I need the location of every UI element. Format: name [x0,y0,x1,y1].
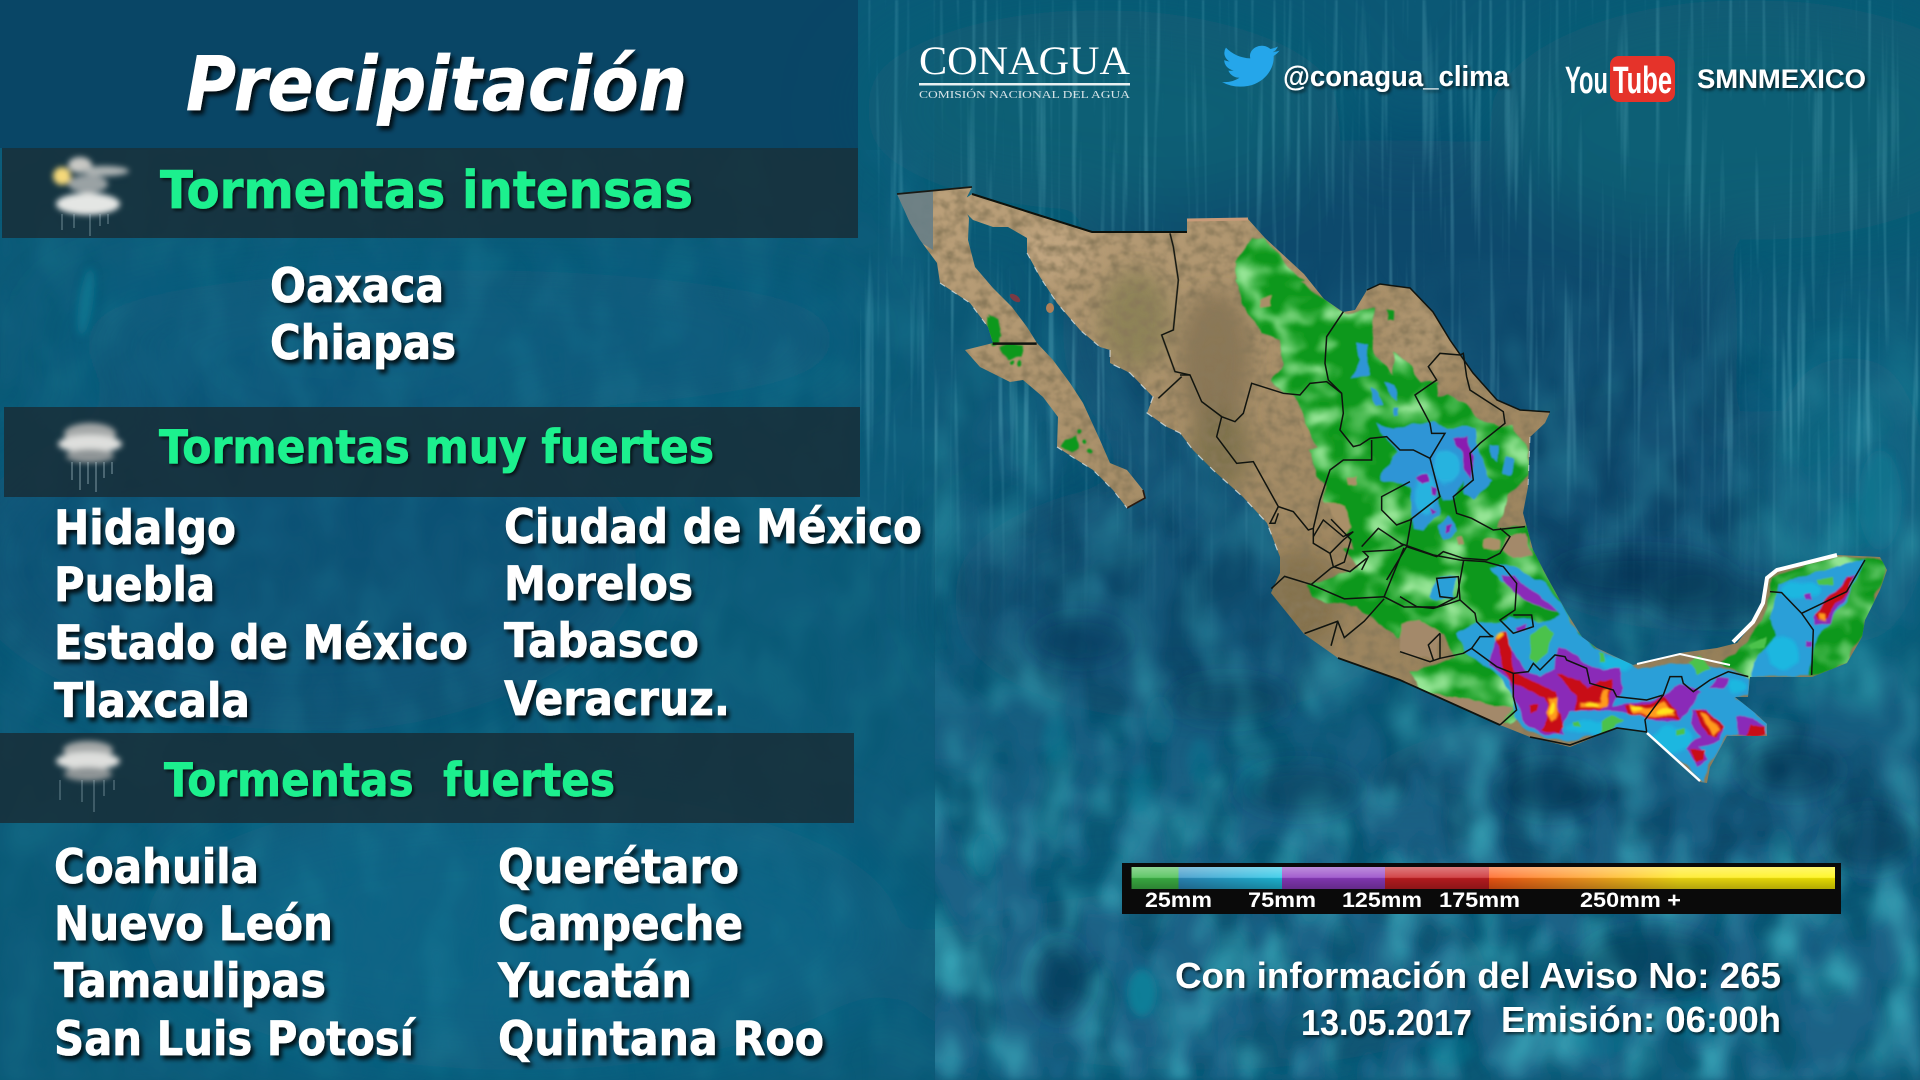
list: very strong, left column: Estado de México [54,616,468,671]
logo: CONAGUA: COMISIÓN NACIONAL DEL AGUA [919,89,1130,101]
twitter handle: @conagua_clima [1283,61,1510,93]
satellite grey corner [898,192,933,250]
panel: tormentas fuertes [0,733,854,823]
list: very strong, right column: Tabasco [504,614,699,669]
youtube channel: SMNMEXICO [1697,64,1866,94]
scale labels: 175mm [1439,889,1520,912]
green patches on Baja [986,317,999,344]
heading: Tormentas fuertes [164,753,615,807]
list: very strong, left column: Hidalgo [54,501,236,556]
small clearings [1260,295,1502,550]
list: strong, left column: Tamaulipas [54,954,326,1009]
list: strong, left column: Coahuila [54,840,259,895]
colour bar [1132,867,1835,889]
heading: Tormentas intensas [160,161,693,221]
list: strong, right column: Campeche [498,897,743,952]
list: strong, left column: San Luis Potosí [54,1012,417,1067]
panel: tormentas intensas [2,148,858,238]
scale labels [1145,889,1681,912]
list: strong, right column: Querétaro [498,840,739,895]
orange and yellow cores [1497,613,1825,735]
icon: rain cloud [58,423,122,492]
scale labels: 250mm + [1580,889,1681,912]
green holes [1530,577,1833,735]
list: very strong, right column [504,500,922,727]
logo: YouTube: You [1565,60,1608,102]
list: strong, left column [54,840,417,1067]
heading: Tormentas muy fuertes [159,420,714,474]
list: very strong, right column: Ciudad de México [504,500,922,555]
icon: sun behind storm cloud [53,157,129,236]
map coastline [897,187,1837,781]
list: strong, right column: Quintana Roo [498,1012,824,1067]
list: very strong, left column: Puebla [54,558,215,613]
blue south [1428,559,1865,783]
list: intense states: Oaxaca [270,259,444,314]
bokeh drops [74,267,1902,1066]
legend: rainfall scale [1122,863,1841,914]
gulf islands [1008,292,1054,313]
list: intense states [270,259,456,371]
map base terrain [880,180,1920,800]
map state borders [897,187,1865,781]
title: Precipitación [186,40,687,128]
list: strong, left column: Nuevo León [54,897,333,952]
scale labels: 125mm [1342,889,1422,912]
logo: CONAGUA [919,38,1130,101]
panel: tormentas muy fuertes [4,407,860,497]
logo: YouTube: Tube [1613,60,1672,102]
bulletin info: 13.05.2017 [1301,1002,1472,1043]
blue centre [1352,343,1513,540]
bulletin info: Con información del Aviso No: 265 [1175,955,1781,996]
list: strong, right column [497,840,824,1067]
tan patches [1393,533,1532,727]
icon: rain cloud [56,741,120,812]
scale labels: 25mm [1145,889,1212,912]
list: intense states: Chiapas [270,316,456,371]
list: strong, right column: Yucatán [497,954,692,1009]
purple south [1490,575,1854,767]
red south [1497,577,1853,762]
icon: twitter bird [1222,46,1280,87]
map rainfall layers [986,237,1886,782]
green band [1234,237,1886,724]
list: very strong, left column [54,501,468,729]
list: very strong, right column: Veracruz. [504,672,730,727]
logo: CONAGUA: CONAGUA [919,38,1130,83]
purple centre [1417,437,1475,532]
list: very strong, left column: Tlaxcala [54,674,250,729]
scale labels: 75mm [1248,889,1316,912]
logo: YouTube [1565,56,1675,102]
header panel [0,0,858,148]
bulletin info [1175,955,1781,1043]
list: very strong, right column: Morelos [504,557,693,612]
bulletin info: Emisión: 06:00h [1501,999,1781,1040]
map: Mexico rainfall [880,180,1920,800]
